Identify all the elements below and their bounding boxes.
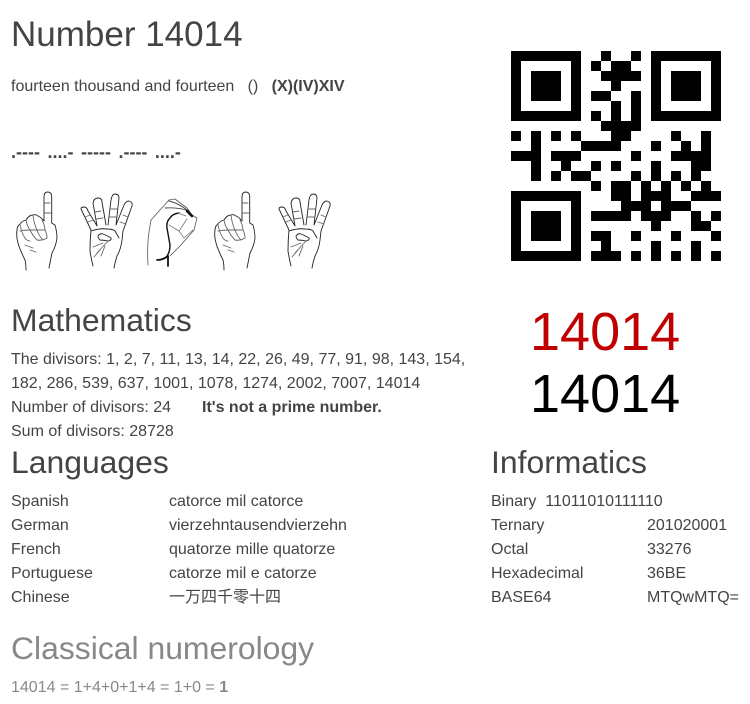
numerology heading: Classical numerology xyxy=(11,630,314,666)
numerology calculation: 14014 = 1+4+0+1+4 = 1+0 = 1 xyxy=(11,679,228,696)
icon: hand sign one xyxy=(215,192,255,270)
icon: sign language hands xyxy=(16,192,331,270)
icon: hand sign four xyxy=(81,194,132,268)
German translation: vierzehntausendvierzehn xyxy=(169,517,347,534)
French: French xyxy=(11,541,61,558)
Chinese: Chinese xyxy=(11,589,70,606)
Portuguese translation: catorze mil e catorze xyxy=(169,565,317,582)
number base conversions xyxy=(491,493,739,606)
icon: hand sign zero xyxy=(148,199,197,266)
hexadecimal: Hexadecimal xyxy=(491,565,583,582)
mathematics heading: Mathematics xyxy=(11,302,192,338)
icon: hand sign one xyxy=(17,192,57,270)
black number: 14014 xyxy=(530,364,680,424)
French translation: quatorze mille quatorze xyxy=(169,541,335,558)
icon: hand sign four xyxy=(279,194,330,268)
octal: Octal xyxy=(491,541,528,558)
divisors list xyxy=(11,351,465,392)
binary: Binary 11011010111110 xyxy=(491,493,663,510)
QR code xyxy=(511,51,721,261)
sum of divisors: Sum of divisors: 28728 xyxy=(11,423,174,440)
Spanish: Spanish xyxy=(11,493,69,510)
hexadecimal value: 36BE xyxy=(647,565,686,582)
BASE64: BASE64 xyxy=(491,589,551,606)
ternary value: 201020001 xyxy=(647,517,727,534)
morse code: .---- ....- ----- .---- ....- xyxy=(11,142,181,162)
divisors list: 182, 286, 539, 637, 1001, 1078, 1274, 2002, 7007, 14014 xyxy=(11,375,420,392)
ternary: Ternary xyxy=(491,517,544,534)
number of divisors: Number of divisors: 24 xyxy=(11,399,171,416)
title: Number 14014 xyxy=(11,15,243,54)
Portuguese: Portuguese xyxy=(11,565,93,582)
prime status: It's not a prime number. xyxy=(202,399,382,416)
Spanish translation: catorce mil catorce xyxy=(169,493,303,510)
BASE64 value: MTQwMTQ= xyxy=(647,589,739,606)
octal value: 33276 xyxy=(647,541,692,558)
language translations xyxy=(11,493,347,606)
German: German xyxy=(11,517,69,534)
divisors list: The divisors: 1, 2, 7, 11, 13, 14, 22, 26, 49, 77, 91, 98, 143, 154, xyxy=(11,351,465,368)
Chinese translation: 一万四千零十四 xyxy=(169,589,281,606)
number in words and roman numeral: fourteen thousand and fourteen () (X)(IV)XIV xyxy=(11,78,345,95)
informatics heading: Informatics xyxy=(491,444,647,480)
red number: 14014 xyxy=(530,302,680,362)
languages heading: Languages xyxy=(11,444,169,480)
